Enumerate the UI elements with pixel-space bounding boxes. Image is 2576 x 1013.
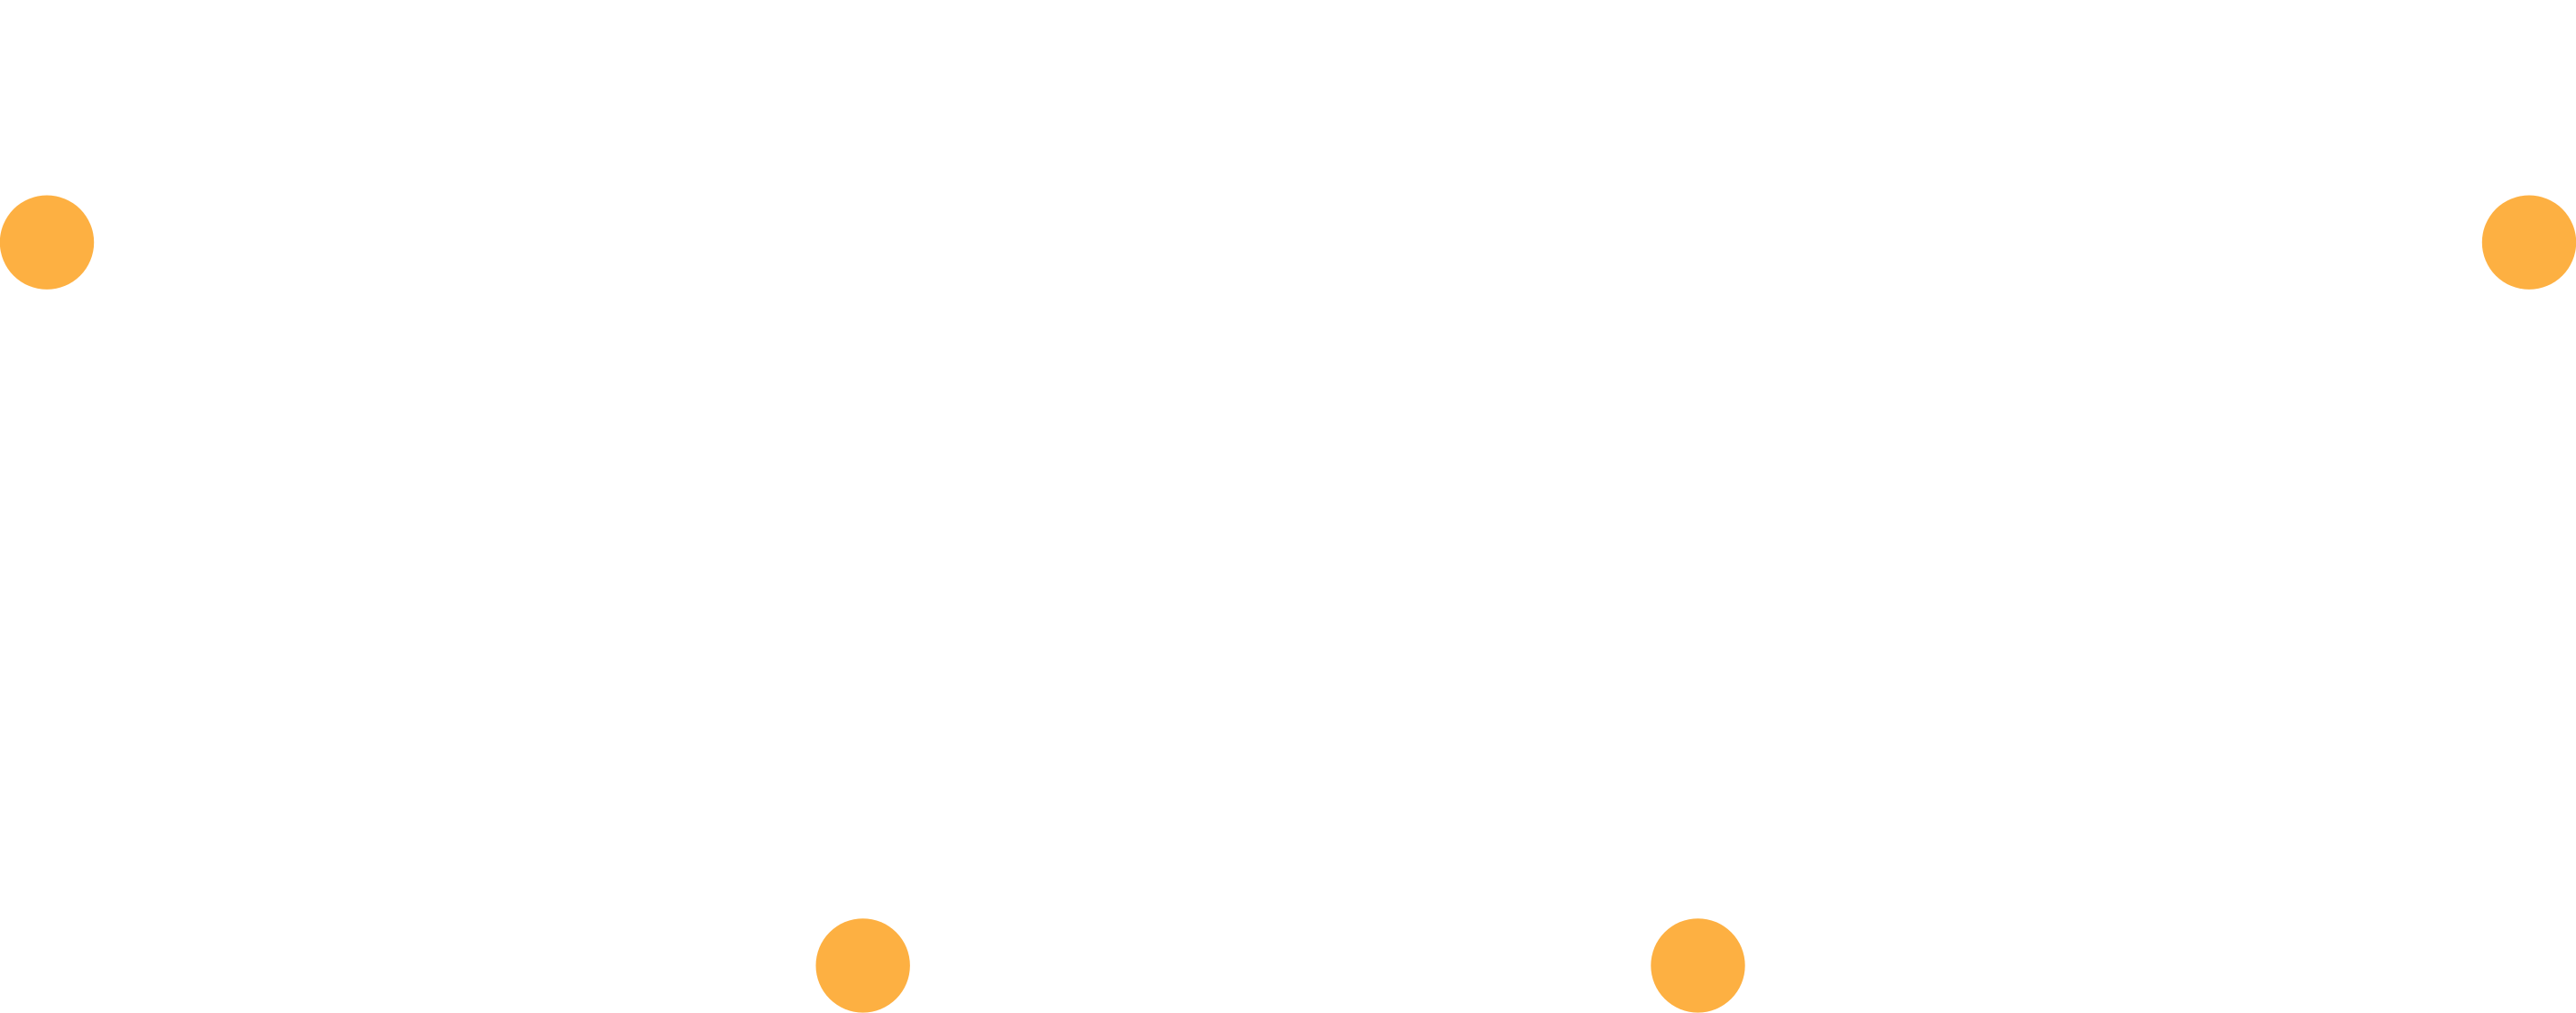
dot: upper right (2482, 196, 2576, 290)
dot: bottom left (815, 918, 910, 1013)
dot: bottom right (1651, 918, 1745, 1013)
dot: upper left (0, 196, 94, 290)
